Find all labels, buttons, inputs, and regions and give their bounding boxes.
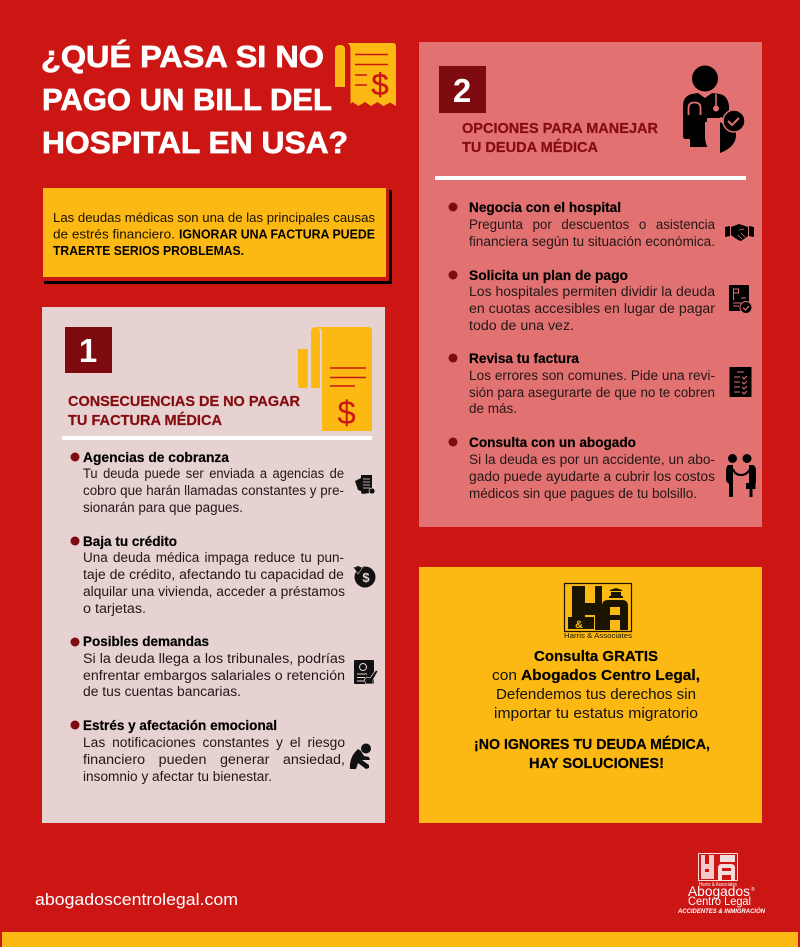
title [41, 39, 348, 160]
item: baja tu crédito: alquilar una vivienda, acceder a préstamos [83, 584, 345, 599]
item: revisa tu factura [448, 350, 752, 416]
panel: call to action [419, 567, 762, 823]
icon: handshake [725, 224, 754, 241]
item: agencias de cobranza: cobro que harán llamadas constantes y pre- [83, 483, 344, 498]
text: consulta gratis: Defendemos tus derechos sin [496, 686, 696, 703]
item: negocia con el hospital: financiera según tu situación económica. [469, 234, 715, 249]
icon: large receipt: $ [337, 394, 356, 431]
heading: opciones: TU DEUDA MÉDICA [462, 139, 598, 156]
item: posibles demandas: Posibles demandas [83, 633, 209, 649]
icon: falling money: $ [362, 570, 370, 585]
item: baja tu crédito: taje de crédito, afectando tu capacidad de [83, 567, 344, 582]
item: posibles demandas: Si la deuda llega a los tribunales, podrías [83, 651, 345, 666]
item: revisa tu factura: sión para asegurarte de que no te cobren [469, 385, 715, 400]
footer logo: Centro Legal [688, 894, 751, 908]
item: revisa tu factura: Los errores son comunes. Pide una revi- [469, 368, 715, 383]
item: solicita un plan de pago: Solicita un plan de pago [469, 267, 628, 283]
item: agencias de cobranza: Tu deuda puede ser enviada a agencias de [83, 466, 344, 481]
text: consulta gratis: importar tu estatus migratorio [494, 705, 698, 722]
item: revisa tu factura: de más. [469, 401, 517, 416]
text: consulta gratis [492, 648, 700, 722]
title: HOSPITAL EN USA? [42, 125, 348, 160]
text: consulta gratis: Abogados Centro Legal, [521, 667, 700, 684]
text: consulta gratis: con [492, 667, 517, 684]
item: baja tu crédito: Baja tu crédito [83, 533, 177, 549]
item: posibles demandas [70, 633, 378, 699]
item: negocia con el hospital: Pregunta por descuentos o asistencia [469, 217, 715, 232]
footer logo: Harris & Associates [699, 882, 737, 888]
icon: checklist [730, 367, 752, 397]
item: negocia con el hospital [448, 199, 754, 249]
heading: opciones: OPCIONES PARA MANEJAR [462, 120, 658, 137]
panel: consecuencias [42, 307, 385, 823]
number badge 1: 1 [79, 332, 97, 369]
icon: large receipt [298, 327, 372, 431]
number badge 2 [439, 66, 486, 113]
item: agencias de cobranza: sionarán para que pagues. [83, 500, 243, 515]
panel: opciones [419, 42, 762, 527]
item: baja tu crédito [70, 533, 376, 616]
footer logo [677, 854, 766, 915]
icon: hospital bill receipt [335, 43, 396, 106]
text: no ignores tu deuda médica [474, 736, 710, 772]
title: PAGO UN BILL DEL [42, 82, 332, 117]
item: negocia con el hospital: Negocia con el hospital [469, 199, 621, 215]
item: consulta con un abogado: Si la deuda es por un accidente, un abo- [469, 452, 715, 467]
item: solicita un plan de pago: en cuotas accesibles en lugar de pagar [469, 301, 716, 316]
item: agencias de cobranza [70, 449, 375, 515]
footer logo: ® [751, 886, 755, 893]
footer bar [0, 932, 800, 950]
number badge 1 [65, 327, 112, 373]
logo: Harris & Associates: & [575, 619, 583, 631]
text: no ignores tu deuda médica: HAY SOLUCIONES! [529, 755, 664, 772]
footer website: abogadoscentrolegal.com [35, 890, 238, 909]
logo: Harris & Associates: Harris & Associates [564, 631, 632, 640]
item: estrés y afectación emocional: Estrés y afectación emocional [83, 717, 277, 733]
item: revisa tu factura: Revisa tu factura [469, 350, 579, 366]
item: estrés y afectación emocional: insomnio y afectar tu bienestar. [83, 769, 272, 784]
text: consulta gratis: Consulta GRATIS [534, 648, 658, 665]
icon: hospital bill receipt: $ [371, 67, 389, 102]
item: solicita un plan de pago: Los hospitales permiten dividir la deuda [469, 284, 716, 299]
number badge 2: 2 [453, 72, 471, 109]
icon: documents [355, 475, 375, 494]
heading: consecuencias: CONSECUENCIAS DE NO PAGAR [68, 393, 300, 410]
item: consulta con un abogado [448, 434, 756, 501]
item: consulta con un abogado: médicos sin que pagues de tu bolsillo. [469, 486, 697, 501]
footer logo: Abogados [688, 883, 750, 899]
callout: intro box [42, 188, 392, 284]
icon: falling money [353, 566, 376, 588]
item: consulta con un abogado: Consulta con un abogado [469, 434, 636, 450]
item: estrés y afectación emocional: Las notificaciones constantes y el riesgo [83, 735, 345, 750]
icon: legal document and gavel [354, 660, 378, 684]
item: estrés y afectación emocional [70, 717, 371, 784]
item: agencias de cobranza: Agencias de cobranza [83, 449, 229, 465]
footer logo: ACCIDENTES & INMIGRACIÓN [677, 908, 766, 915]
heading: opciones [462, 120, 658, 156]
logo: Harris & Associates [564, 584, 632, 640]
item: posibles demandas: enfrentar embargos salariales o retención [83, 668, 345, 683]
callout: intro box: TRAERTE SERIOS PROBLEMAS. [53, 243, 244, 258]
icon: payment plan document [729, 285, 752, 314]
callout: intro box: IGNORAR UNA FACTURA PUEDE [179, 226, 375, 242]
text: no ignores tu deuda médica: ¡NO IGNORES TU DEUDA MÉDICA, [474, 736, 710, 753]
callout: intro box: Las deudas médicas son una de las principales causas [53, 210, 375, 225]
item: estrés y afectación emocional: financiero pueden generar ansiedad, [83, 752, 345, 767]
item: baja tu crédito: Una deuda médica impaga reduce tu pun- [83, 550, 344, 565]
item: baja tu crédito: o tarjetas. [83, 601, 146, 616]
heading: consecuencias: TU FACTURA MÉDICA [68, 412, 222, 429]
item: consulta con un abogado: gado puede ayudarte a cubrir los costos [469, 469, 715, 484]
icon: distressed person [350, 744, 371, 769]
title: ¿QUÉ PASA SI NO [41, 39, 324, 74]
icon: doctor with shield [683, 66, 745, 157]
heading: consecuencias [68, 393, 300, 429]
callout: intro box: de estrés financiero. [53, 226, 175, 242]
icon: client and lawyer shaking hands [726, 454, 756, 497]
item: posibles demandas: de tus cuentas bancarias. [83, 684, 241, 699]
item: solicita un plan de pago [448, 267, 752, 333]
item: solicita un plan de pago: todo de una vez. [469, 318, 574, 333]
